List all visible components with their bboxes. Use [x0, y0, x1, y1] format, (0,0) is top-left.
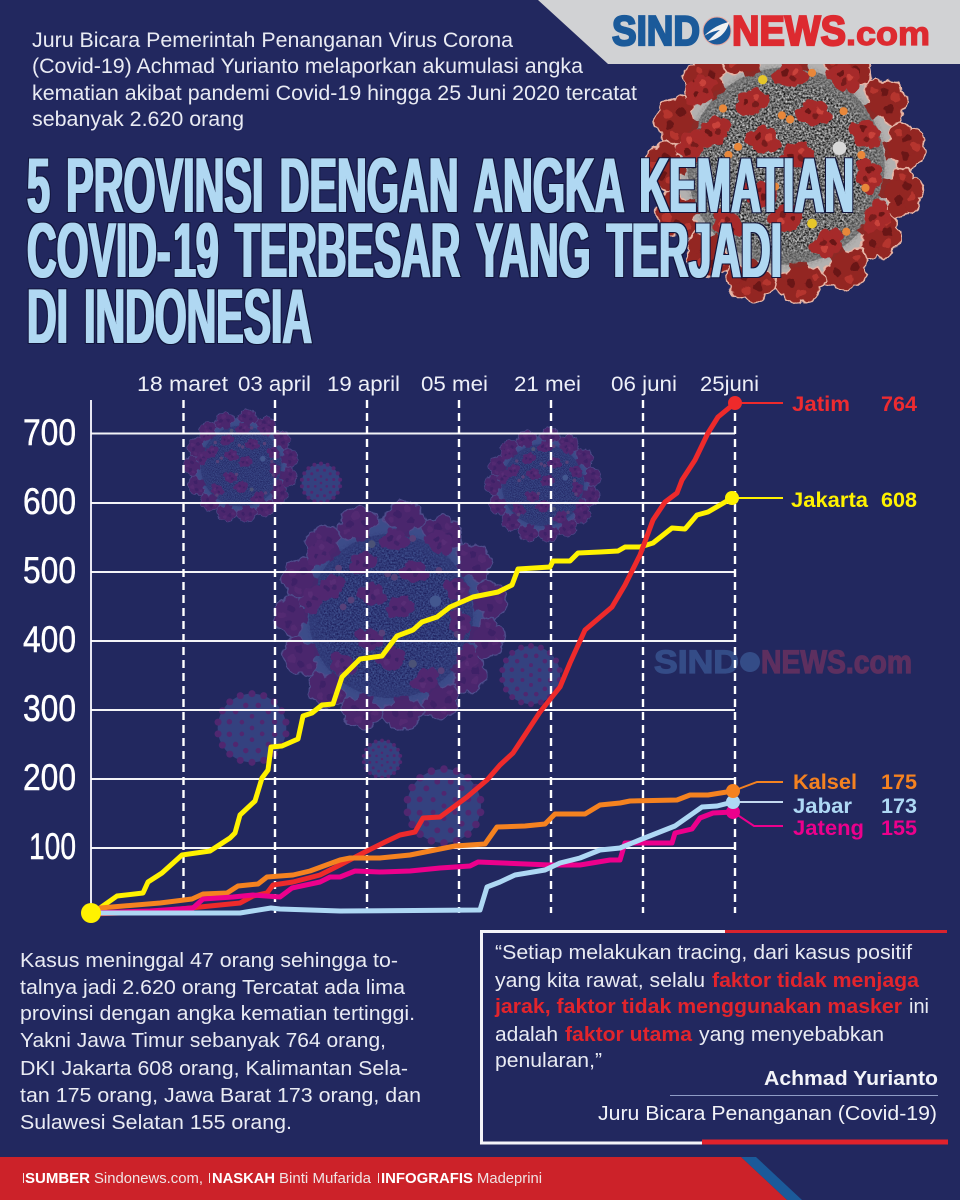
footer credits [22, 1171, 542, 1187]
series labels with values: 173 [881, 794, 917, 818]
footer credits: SUMBER [25, 1171, 91, 1187]
watermark: Sindonews [654, 644, 912, 680]
x axis date labels [137, 373, 759, 396]
x axis date labels: 21 mei [514, 373, 581, 396]
y axis labels: 500 [23, 550, 76, 591]
series labels with values: Jabar [793, 794, 853, 818]
line: Jateng [91, 812, 733, 913]
series labels with values: Jakarta [791, 488, 869, 512]
y axis labels [23, 412, 76, 867]
footer credits: Binti Mufarida [279, 1171, 372, 1187]
line: Kalsel [91, 791, 733, 912]
footer band [0, 1157, 802, 1200]
series labels with values: 155 [881, 816, 917, 840]
summary text block: tan 175 orang, Jawa Barat 173 orang, dan [20, 1085, 421, 1107]
logo: Sindonews: .com [846, 15, 930, 52]
quote text: jarak, faktor tidak menggunakan masker [494, 995, 902, 1018]
series labels with values: Kalsel [793, 770, 857, 794]
intro text: kematian akibat pandemi Covid-19 hingga 25 Juni 2020 tercatat [32, 82, 637, 105]
summary text block: Sulawesi Selatan 155 orang. [20, 1112, 292, 1134]
logo: Sindonews [612, 7, 930, 54]
quote text: faktor utama [565, 1023, 693, 1046]
footer credits: Madeprini [477, 1171, 542, 1187]
logo: Sindonews: SIND [612, 7, 700, 54]
quote attribution [598, 1067, 938, 1125]
x axis date labels: 05 mei [421, 373, 488, 396]
line: Jabar [91, 802, 733, 913]
footer credits: Sindonews.com, [94, 1171, 203, 1187]
x axis date labels: 18 maret [137, 373, 228, 396]
y axis labels: 300 [23, 688, 76, 729]
y axis labels: 600 [23, 481, 76, 522]
y axis labels: 200 [23, 757, 76, 798]
y axis labels: 700 [23, 412, 76, 453]
quote text: adalah [495, 1023, 558, 1046]
footer credits: I [377, 1171, 380, 1187]
series labels with values: Jatim [792, 392, 850, 416]
x axis date labels: 25juni [700, 373, 759, 396]
quote text: yang kita rawat, selalu [495, 969, 705, 992]
y axis labels: 400 [23, 619, 76, 660]
quote text: penularan,” [495, 1049, 602, 1072]
summary text block: provinsi dengan angka kematian tertinggi. [20, 1003, 415, 1025]
footer credits: NASKAH [212, 1171, 275, 1187]
line: Jatim [91, 403, 735, 914]
watermark: Sindonews: NEWS.com [761, 644, 912, 680]
quote text [494, 941, 929, 1072]
quote text: faktor tidak menjaga [712, 969, 920, 992]
title [27, 141, 854, 360]
series labels with values: 764 [881, 392, 917, 416]
quote text: “Setiap melakukan tracing, dari kasus positif [495, 941, 912, 964]
logo: Sindonews: NEWS [732, 7, 846, 54]
summary text block: Yakni Jawa Timur sebanyak 764 orang, [20, 1030, 386, 1052]
quote attribution: Juru Bicara Penanganan (Covid-19) [598, 1102, 937, 1125]
x axis date labels: 03 april [238, 373, 311, 396]
series labels with values: 608 [881, 488, 917, 512]
quote text: yang menyebabkan [699, 1023, 884, 1046]
header band [538, 0, 960, 64]
summary text block: Kasus meninggal 47 orang sehingga to- [20, 950, 398, 972]
series labels with values: Jateng [793, 816, 864, 840]
line: Jakarta [91, 498, 732, 913]
x axis date labels: 19 april [327, 373, 400, 396]
illustration: coronavirus top right [646, 25, 928, 307]
intro text: (Covid-19) Achmad Yurianto melaporkan akumulasi angka [32, 55, 583, 78]
title: DI INDONESIA [27, 272, 312, 360]
chart grid and axis [91, 400, 735, 913]
intro text [32, 29, 637, 131]
quote frame [482, 932, 948, 1143]
y axis labels: 100 [29, 826, 76, 867]
series labels with values [791, 392, 917, 840]
footer credits: INFOGRAFIS [381, 1171, 473, 1187]
series labels with values: 175 [881, 770, 917, 794]
intro text: sebanyak 2.620 orang [32, 108, 244, 131]
intro text: Juru Bicara Pemerintah Penanganan Virus Corona [32, 29, 513, 52]
connectors and end markers [81, 396, 783, 923]
watermark: Sindonews: SIND [654, 644, 739, 680]
footer credits: I [22, 1171, 25, 1187]
summary text block: DKI Jakarta 608 orang, Kalimantan Sela- [20, 1058, 408, 1080]
faded background viruses [184, 409, 602, 847]
quote attribution: Achmad Yurianto [764, 1067, 938, 1090]
quote text: ini [909, 995, 929, 1018]
summary text block: talnya jadi 2.620 orang Tercatat ada lima [20, 977, 406, 999]
footer credits: I [208, 1171, 211, 1187]
x axis date labels: 06 juni [611, 373, 677, 396]
summary text block [20, 950, 421, 1134]
